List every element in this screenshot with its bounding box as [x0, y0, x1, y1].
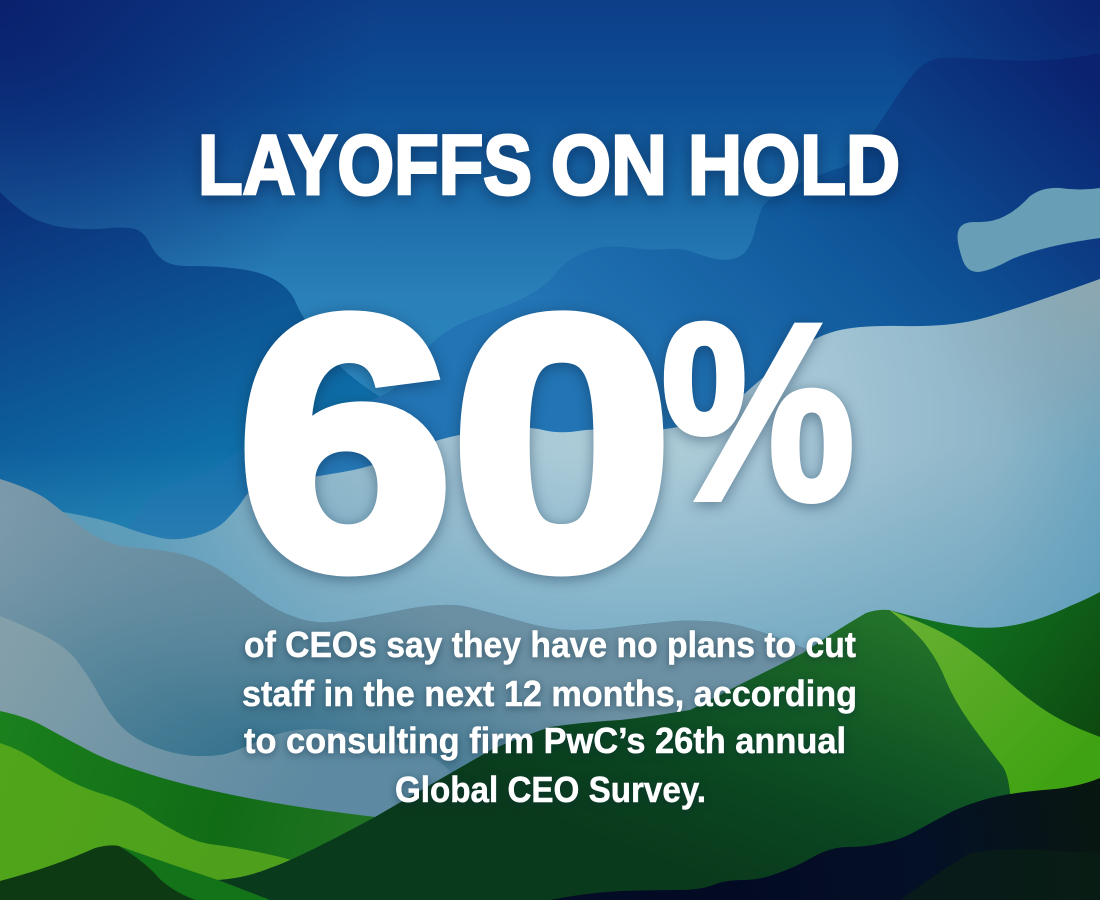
- line 3: to consulting firm PwC’s 26th annual: [244, 720, 846, 761]
- line 4: Global CEO Survey.: [395, 769, 706, 810]
- mid blue-grey wave: [0, 479, 830, 900]
- dark blue wave: upper right: [130, 53, 1100, 600]
- light green hill: left: [0, 743, 310, 900]
- green hill: left back: [0, 711, 400, 900]
- title word: LAYOFFS: LAYOFFS: [198, 118, 532, 212]
- description text: [242, 624, 857, 810]
- dark foreground hill tint: [901, 849, 1100, 900]
- percent sign: %: [661, 272, 855, 553]
- blue wave: lower left tail: [130, 448, 246, 600]
- lower blue-grey wave: [0, 616, 470, 900]
- cloud shape at right: [958, 188, 1100, 272]
- digit 6: 6: [238, 245, 452, 642]
- dark green hill: lower left corner: [0, 845, 195, 900]
- digit 0: 0: [452, 245, 672, 642]
- dark blue wave: upper left: [0, 192, 382, 560]
- line 1: of CEOs say they have no plans to cut: [244, 624, 856, 665]
- title: [198, 118, 900, 212]
- main dark green hill: [218, 610, 1010, 900]
- title word: ON: ON: [551, 118, 667, 212]
- big statistic: 60%: [238, 245, 855, 642]
- pale sky wave: [0, 279, 1100, 900]
- green band: lower left: [119, 846, 270, 900]
- near-black foreground ridge: [550, 778, 1100, 900]
- line 2: staff in the next 12 months, according: [242, 673, 857, 714]
- green hill: right: [889, 592, 1100, 900]
- light green stripe: [889, 610, 1100, 800]
- title word: HOLD: HOLD: [688, 118, 900, 212]
